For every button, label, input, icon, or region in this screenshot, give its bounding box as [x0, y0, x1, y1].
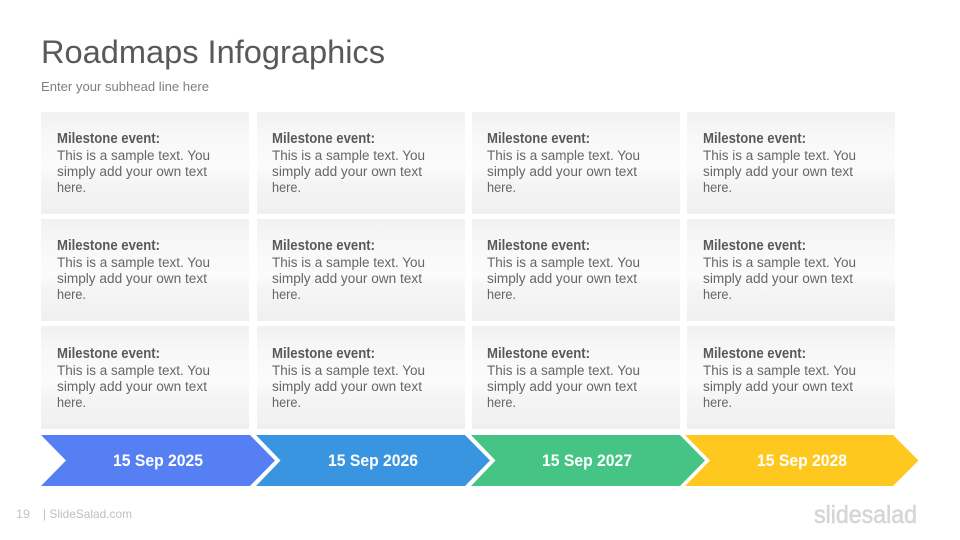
card: row 2 column 1: Milestone event: — [57, 238, 160, 254]
card: row 3 column 3: Milestone event: — [487, 346, 590, 362]
card: row 3 column 2: here. — [272, 395, 301, 410]
card: row 2 column 4: simply add your own text — [703, 271, 853, 286]
card: row 3 column 4: Milestone event: — [703, 346, 806, 362]
footer site name: | SlideSalad.com — [43, 507, 132, 521]
card: row 1 column 2: Milestone event: — [272, 131, 375, 147]
title: Roadmaps Infographics — [41, 34, 385, 70]
card: row 2 column 3 — [472, 219, 680, 321]
card: row 1 column 1: simply add your own text — [57, 164, 207, 179]
arrow: 15 Sep 2027 — [471, 435, 705, 486]
card: row 2 column 4: This is a sample text. You — [703, 255, 856, 270]
card: row 1 column 3: here. — [487, 180, 516, 195]
card: row 1 column 3 — [472, 112, 680, 214]
logo: slidesalad: slidesalad — [814, 501, 917, 529]
card: row 1 column 4: This is a sample text. You — [703, 148, 856, 163]
card: row 3 column 1: This is a sample text. You — [57, 363, 210, 378]
arrow: 15 Sep 2026 — [256, 435, 490, 486]
card: row 3 column 2: This is a sample text. You — [272, 363, 425, 378]
card: row 1 column 3: simply add your own text — [487, 164, 637, 179]
card: row 1 column 4: simply add your own text — [703, 164, 853, 179]
card: row 3 column 2: Milestone event: — [272, 346, 375, 362]
card: row 1 column 4: here. — [703, 180, 732, 195]
card: row 2 column 3: This is a sample text. You — [487, 255, 640, 270]
arrow: 15 Sep 2028: 15 Sep 2028 — [757, 451, 847, 470]
card: row 2 column 1: here. — [57, 287, 86, 302]
card: row 3 column 4: simply add your own text — [703, 379, 853, 394]
arrow: 15 Sep 2027: 15 Sep 2027 — [542, 451, 632, 470]
card: row 3 column 3: This is a sample text. You — [487, 363, 640, 378]
card: row 2 column 1 — [41, 219, 249, 321]
card: row 2 column 3: simply add your own text — [487, 271, 637, 286]
card: row 2 column 4: here. — [703, 287, 732, 302]
card: row 2 column 2: here. — [272, 287, 301, 302]
card: row 2 column 1: This is a sample text. You — [57, 255, 210, 270]
arrow: 15 Sep 2025 — [41, 435, 275, 486]
card: row 1 column 3: This is a sample text. You — [487, 148, 640, 163]
card: row 1 column 4: Milestone event: — [703, 131, 806, 147]
card: row 3 column 3: here. — [487, 395, 516, 410]
card: row 2 column 1: simply add your own text — [57, 271, 207, 286]
card: row 3 column 1: Milestone event: — [57, 346, 160, 362]
card: row 1 column 3: Milestone event: — [487, 131, 590, 147]
card: row 2 column 2: Milestone event: — [272, 238, 375, 254]
card: row 1 column 1: Milestone event: — [57, 131, 160, 147]
card: row 1 column 1: This is a sample text. You — [57, 148, 210, 163]
card: row 1 column 1: here. — [57, 180, 86, 195]
arrow: 15 Sep 2026: 15 Sep 2026 — [328, 451, 418, 470]
card: row 3 column 2 — [257, 326, 465, 429]
card: row 2 column 2: simply add your own text — [272, 271, 422, 286]
card: row 2 column 3: Milestone event: — [487, 238, 590, 254]
card: row 2 column 4: Milestone event: — [703, 238, 806, 254]
card: row 1 column 2 — [257, 112, 465, 214]
card: row 3 column 4: This is a sample text. You — [703, 363, 856, 378]
arrow: 15 Sep 2028 — [685, 435, 918, 486]
card: row 3 column 1: here. — [57, 395, 86, 410]
card: row 3 column 4: here. — [703, 395, 732, 410]
card: row 3 column 2: simply add your own text — [272, 379, 422, 394]
subhead: Enter your subhead line here — [41, 79, 209, 94]
card: row 1 column 4 — [687, 112, 895, 214]
timeline arrows — [41, 435, 918, 486]
card: row 2 column 2: This is a sample text. You — [272, 255, 425, 270]
arrow: 15 Sep 2025: 15 Sep 2025 — [113, 451, 203, 470]
card: row 1 column 2: here. — [272, 180, 301, 195]
card: row 3 column 1 — [41, 326, 249, 429]
page number: 19 — [16, 507, 30, 521]
card: row 2 column 3: here. — [487, 287, 516, 302]
card: row 3 column 1: simply add your own text — [57, 379, 207, 394]
card: row 3 column 3: simply add your own text — [487, 379, 637, 394]
card: row 3 column 3 — [472, 326, 680, 429]
card: row 3 column 4 — [687, 326, 895, 429]
card: row 1 column 2: simply add your own text — [272, 164, 422, 179]
panel: milestone grid — [41, 112, 895, 429]
card: row 2 column 2 — [257, 219, 465, 321]
card: row 1 column 1 — [41, 112, 249, 214]
card: row 1 column 2: This is a sample text. You — [272, 148, 425, 163]
card: row 2 column 4 — [687, 219, 895, 321]
